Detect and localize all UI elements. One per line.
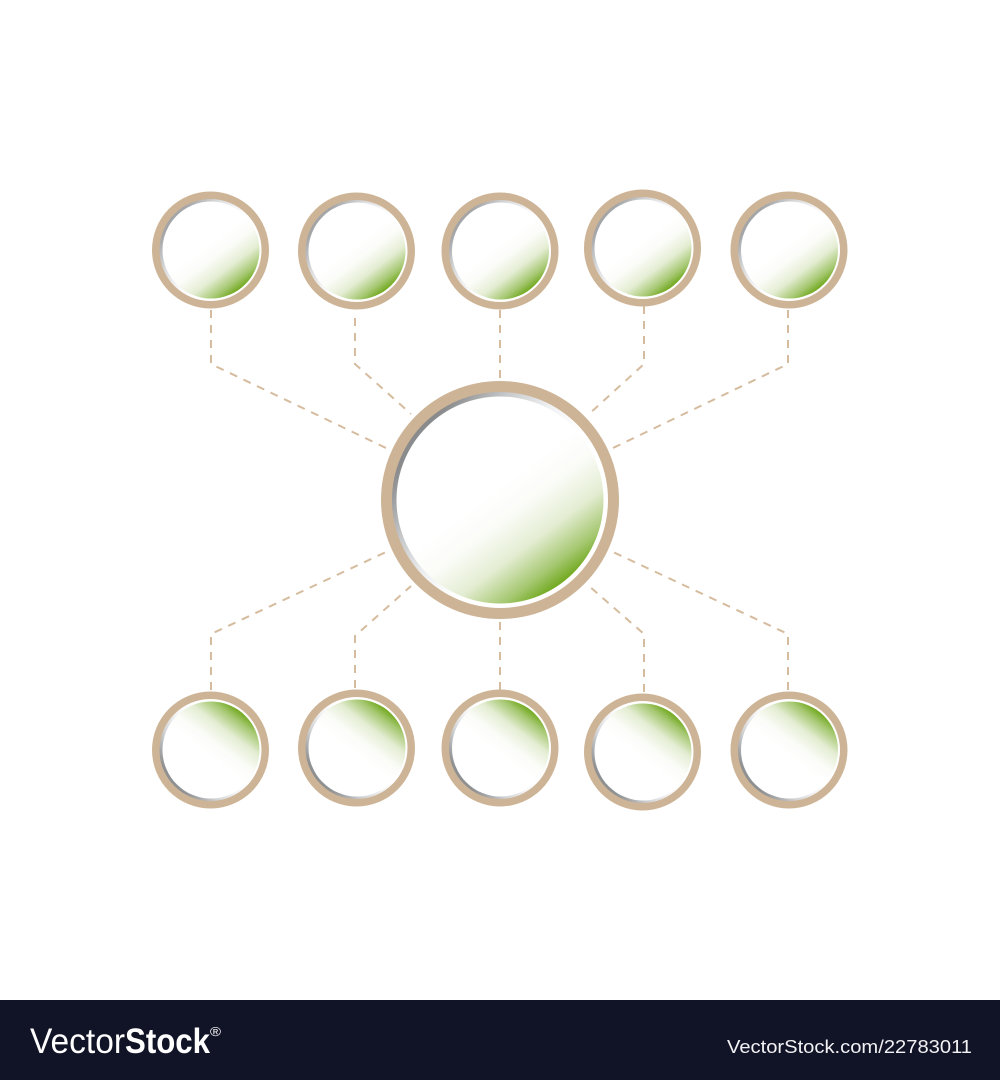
bottom circle 4	[584, 694, 701, 810]
central circle	[381, 381, 619, 619]
bottom circle 5	[730, 692, 848, 808]
top circle 2	[298, 192, 415, 310]
footer logo: Vector	[30, 1022, 125, 1061]
footer logo	[30, 1022, 221, 1061]
top circle 3	[442, 192, 558, 310]
bottom circle 1	[152, 692, 269, 808]
footer logo: ®	[210, 1024, 221, 1039]
footer bar	[0, 1000, 1000, 1080]
top circle 4	[584, 190, 701, 306]
bottom circle 3	[442, 690, 558, 806]
footer logo: Stock	[125, 1022, 210, 1061]
bottom circle 2	[298, 690, 415, 806]
dashed connectors	[211, 306, 788, 692]
footer image id: VectorStock.com/22783011	[727, 1036, 972, 1057]
top circle 5	[730, 192, 848, 308]
top circle 1	[152, 192, 269, 308]
